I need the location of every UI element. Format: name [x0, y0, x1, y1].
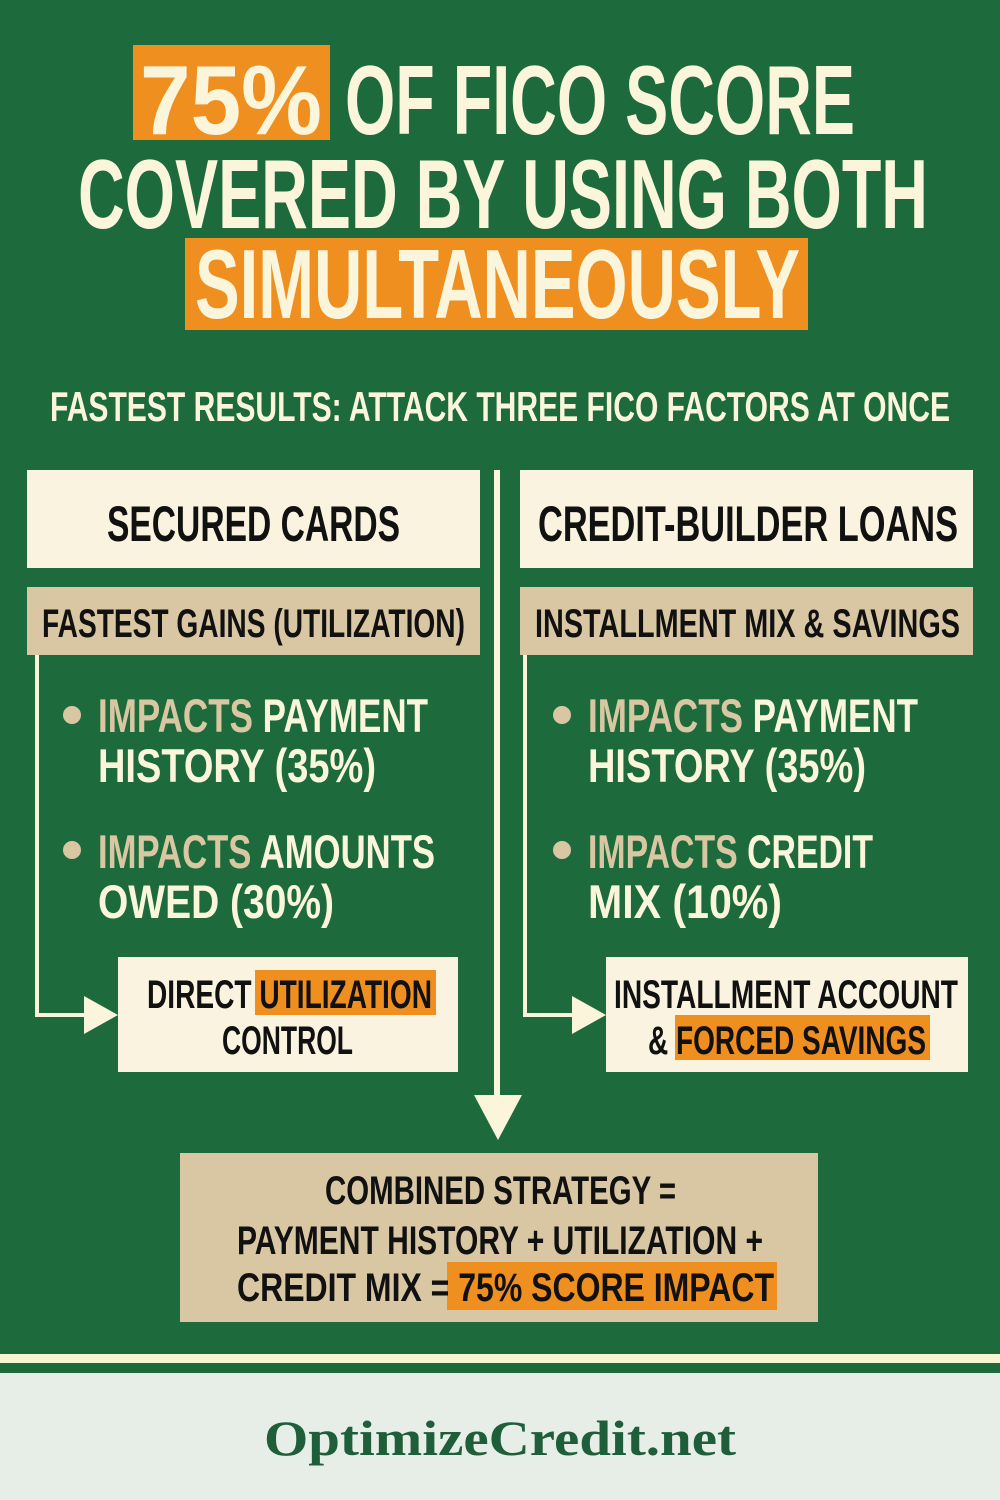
subheading: installment mix: [520, 587, 973, 655]
callout: direct utilization control: [118, 957, 458, 1072]
callout: installment account: [606, 957, 968, 1072]
heading: credit-builder loans: [520, 470, 973, 568]
bullets: secured: HISTORY (35%): [98, 739, 376, 792]
callout: direct utilization control: DIRECT UTILIZATION: [147, 973, 432, 1017]
bullets: loans: [553, 689, 918, 928]
bullets: secured: IMPACTS PAYMENT: [98, 689, 428, 742]
footer: OptimizeCredit.net: [264, 1410, 736, 1466]
heading: secured cards: SECURED CARDS: [107, 496, 400, 552]
bullets: secured: IMPACTS AMOUNTS: [98, 825, 435, 878]
title: 75%: [140, 45, 322, 155]
heading: secured cards: [27, 470, 480, 568]
summary box: PAYMENT HISTORY + UTILIZATION +: [237, 1219, 763, 1263]
bullets: loans: IMPACTS CREDIT: [588, 825, 873, 878]
title: [78, 45, 928, 339]
summary box: COMBINED STRATEGY =: [325, 1169, 676, 1213]
arrow: right bracket: [523, 655, 606, 1034]
footer: [0, 1354, 1000, 1500]
summary box: [180, 1153, 818, 1322]
callout: direct utilization control: CONTROL: [222, 1019, 353, 1063]
bullets: secured: [63, 689, 435, 928]
arrow: left bracket: [35, 655, 118, 1034]
summary box: CREDIT MIX = 75% SCORE IMPACT: [237, 1266, 774, 1310]
subheading: fastest gains: FASTEST GAINS (UTILIZATION): [42, 602, 465, 646]
bullets: loans: IMPACTS PAYMENT: [588, 689, 918, 742]
panel: secured cards: [27, 470, 480, 1072]
panel: credit-builder loans: [520, 470, 973, 1072]
arrow: center down: [474, 470, 522, 1140]
bullets: secured: OWED (30%): [98, 875, 334, 928]
bullets: loans: MIX (10%): [588, 875, 782, 928]
bullets: loans: HISTORY (35%): [588, 739, 866, 792]
subheading: fastest gains: [27, 587, 480, 655]
